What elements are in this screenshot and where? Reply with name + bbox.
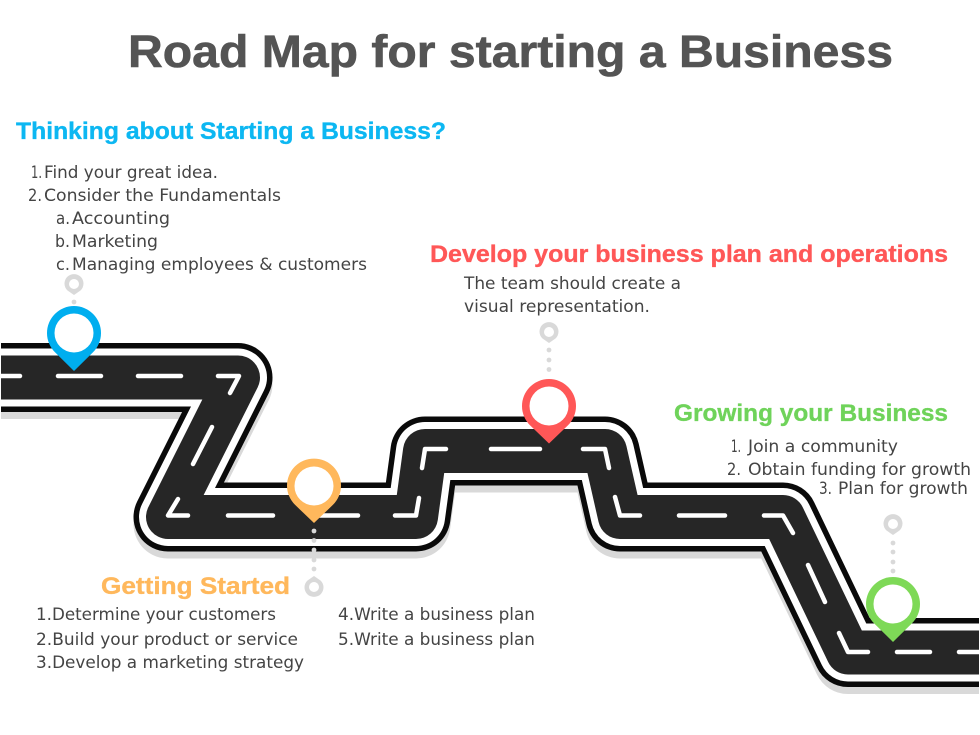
list: growing steps: 2. (727, 460, 741, 479)
heading: thinking: Thinking about Starting a Business? (16, 118, 446, 145)
heading: getting started: Getting Started (101, 573, 290, 600)
pin: orange (287, 459, 341, 523)
section: thinking about starting (16, 118, 446, 274)
road (1, 376, 979, 660)
connector: orange small marker (304, 529, 324, 597)
list: thinking steps: Consider the Fundamentals (44, 186, 281, 205)
text: develop description: visual representation. (464, 297, 650, 316)
title: Road Map for starting a Business (128, 26, 893, 77)
list: growing steps (727, 437, 971, 498)
list: growing steps: Plan for growth (838, 479, 968, 498)
list: growing steps: Join a community (747, 437, 898, 456)
list: thinking steps: a. (56, 209, 70, 228)
list: thinking steps: Find your great idea. (44, 163, 218, 182)
list: thinking steps (28, 163, 367, 274)
section: getting started (36, 573, 535, 672)
list: getting started steps: 1.Determine your customers (36, 605, 276, 624)
list: getting started steps: 5.Write a business plan (338, 630, 535, 649)
list: thinking steps: Marketing (72, 232, 158, 251)
list: growing steps: 3. (819, 479, 832, 498)
road asphalt (1, 378, 979, 652)
pin: green (866, 577, 920, 642)
list: getting started steps: 4.Write a business plan (338, 605, 535, 624)
list: thinking steps: Managing employees & customers (72, 255, 367, 274)
list: thinking steps: 1. (31, 163, 42, 182)
road white edge line (1, 378, 979, 652)
list: thinking steps: b. (55, 232, 70, 251)
list: thinking steps: c. (56, 255, 70, 274)
road shadow (1, 384, 979, 660)
list: growing steps: Obtain funding for growth (748, 460, 971, 479)
list: getting started steps: 3.Develop a marketing strategy (36, 653, 304, 672)
list: getting started steps: 2.Build your product or service (36, 630, 298, 649)
heading: develop: Develop your business plan and operations (430, 241, 948, 268)
connector: red small marker (540, 322, 558, 372)
heading: growing: Growing your Business (674, 400, 948, 427)
list: thinking steps: 2. (28, 186, 42, 205)
pin: blue (47, 306, 101, 371)
section: develop plan (430, 241, 948, 316)
list: thinking steps: Accounting (72, 209, 170, 228)
connector: green small marker (884, 514, 902, 573)
road centre dashes (1, 376, 979, 652)
pin: red (522, 379, 576, 444)
text: develop description (463, 274, 681, 316)
road black edge (1, 378, 979, 652)
list: getting started steps (36, 605, 535, 672)
section: growing (674, 400, 971, 498)
list: growing steps: 1. (731, 437, 741, 456)
connector: blue small marker (64, 274, 84, 304)
text: develop description: The team should create a (463, 274, 681, 293)
